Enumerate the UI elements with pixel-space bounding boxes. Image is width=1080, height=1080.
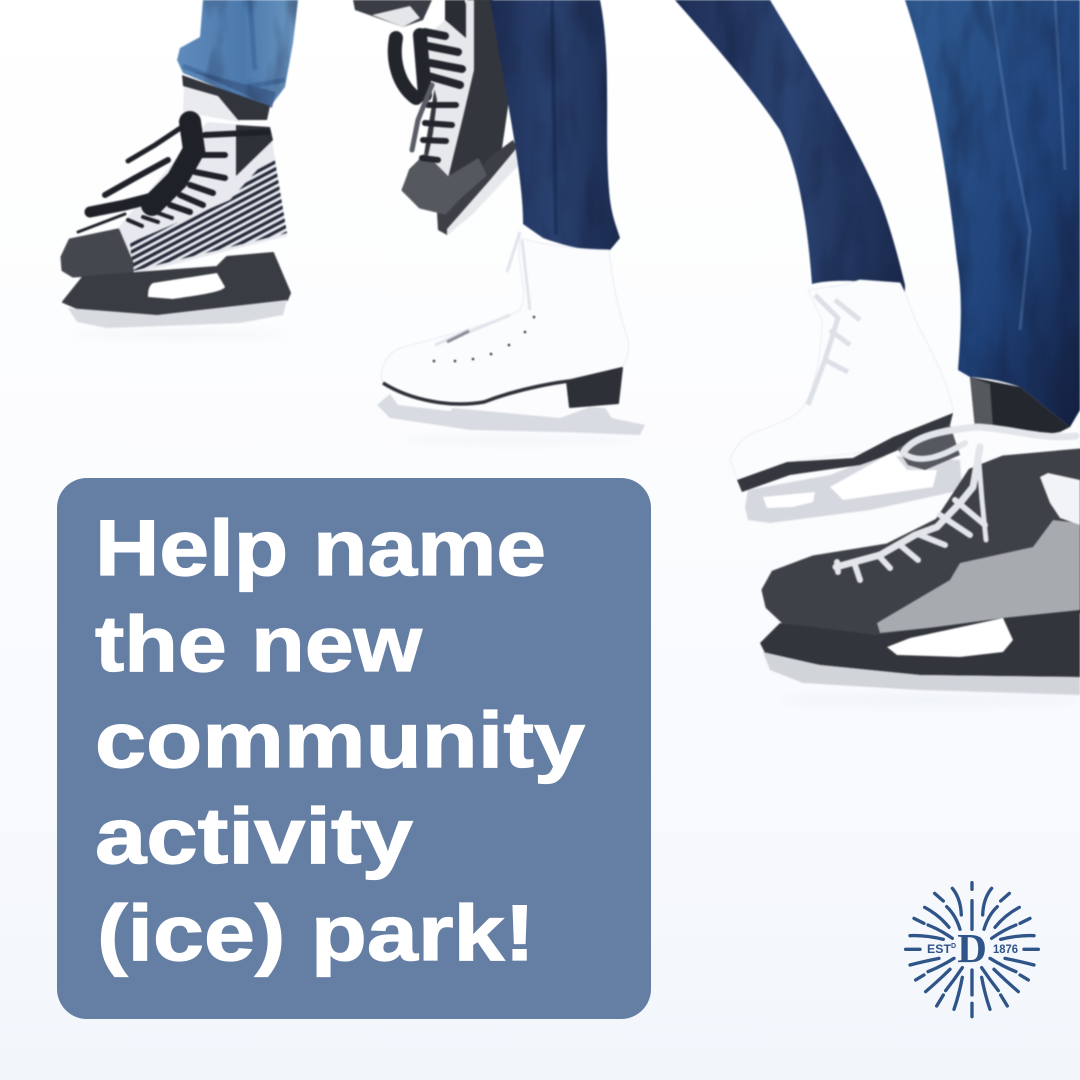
headline text: the new	[95, 599, 423, 688]
headline text: (ice) park!	[97, 888, 535, 977]
blade	[68, 300, 287, 328]
established label: EST	[927, 944, 951, 956]
holder	[63, 253, 290, 315]
logo: Est. 1876 starburst emblem	[906, 883, 1038, 1017]
left hockey skate with striped boot	[62, 75, 300, 328]
sock	[183, 84, 240, 122]
soft skate shadows on the ice	[70, 331, 1080, 704]
starburst rays	[906, 883, 1038, 1017]
sole	[737, 413, 953, 492]
hanging hockey skate	[353, 0, 523, 235]
headline text: activity	[95, 791, 413, 880]
monogram D: D	[957, 925, 987, 971]
sock	[970, 377, 1070, 436]
headline text	[95, 503, 585, 977]
boot upper	[118, 122, 287, 274]
toe cap	[62, 230, 132, 276]
photo: skaters' legs and skates	[62, 0, 1080, 695]
boot	[763, 450, 1080, 635]
boot	[381, 238, 629, 404]
eyelets and laces	[433, 316, 535, 362]
holder	[760, 610, 1080, 677]
middle leg: dark skinny jeans	[490, 0, 620, 250]
far right leg: denim jeans	[905, 0, 1080, 427]
year label: 1876	[993, 944, 1018, 956]
grey panel	[877, 520, 1080, 633]
sole	[383, 381, 570, 404]
boot	[730, 280, 953, 485]
headline text: Help name	[95, 503, 546, 592]
blade	[745, 455, 962, 523]
left leg: light jeans	[177, 0, 298, 108]
blade	[377, 394, 645, 435]
black laces	[78, 122, 268, 232]
laces	[808, 295, 860, 405]
right leg: dark jeans	[675, 0, 905, 293]
white laces	[836, 427, 1076, 580]
heel	[567, 368, 622, 407]
white patch	[1040, 473, 1080, 525]
headline text: community	[95, 695, 585, 784]
panel background	[57, 478, 651, 1019]
white figure skate, centre	[377, 232, 645, 435]
headline panel	[57, 478, 651, 1019]
hockey skate, lower right	[760, 377, 1080, 695]
superscript D: D	[951, 943, 956, 950]
boot stripes	[129, 160, 288, 272]
white figure skate, right	[730, 280, 962, 523]
blade	[763, 652, 1080, 695]
